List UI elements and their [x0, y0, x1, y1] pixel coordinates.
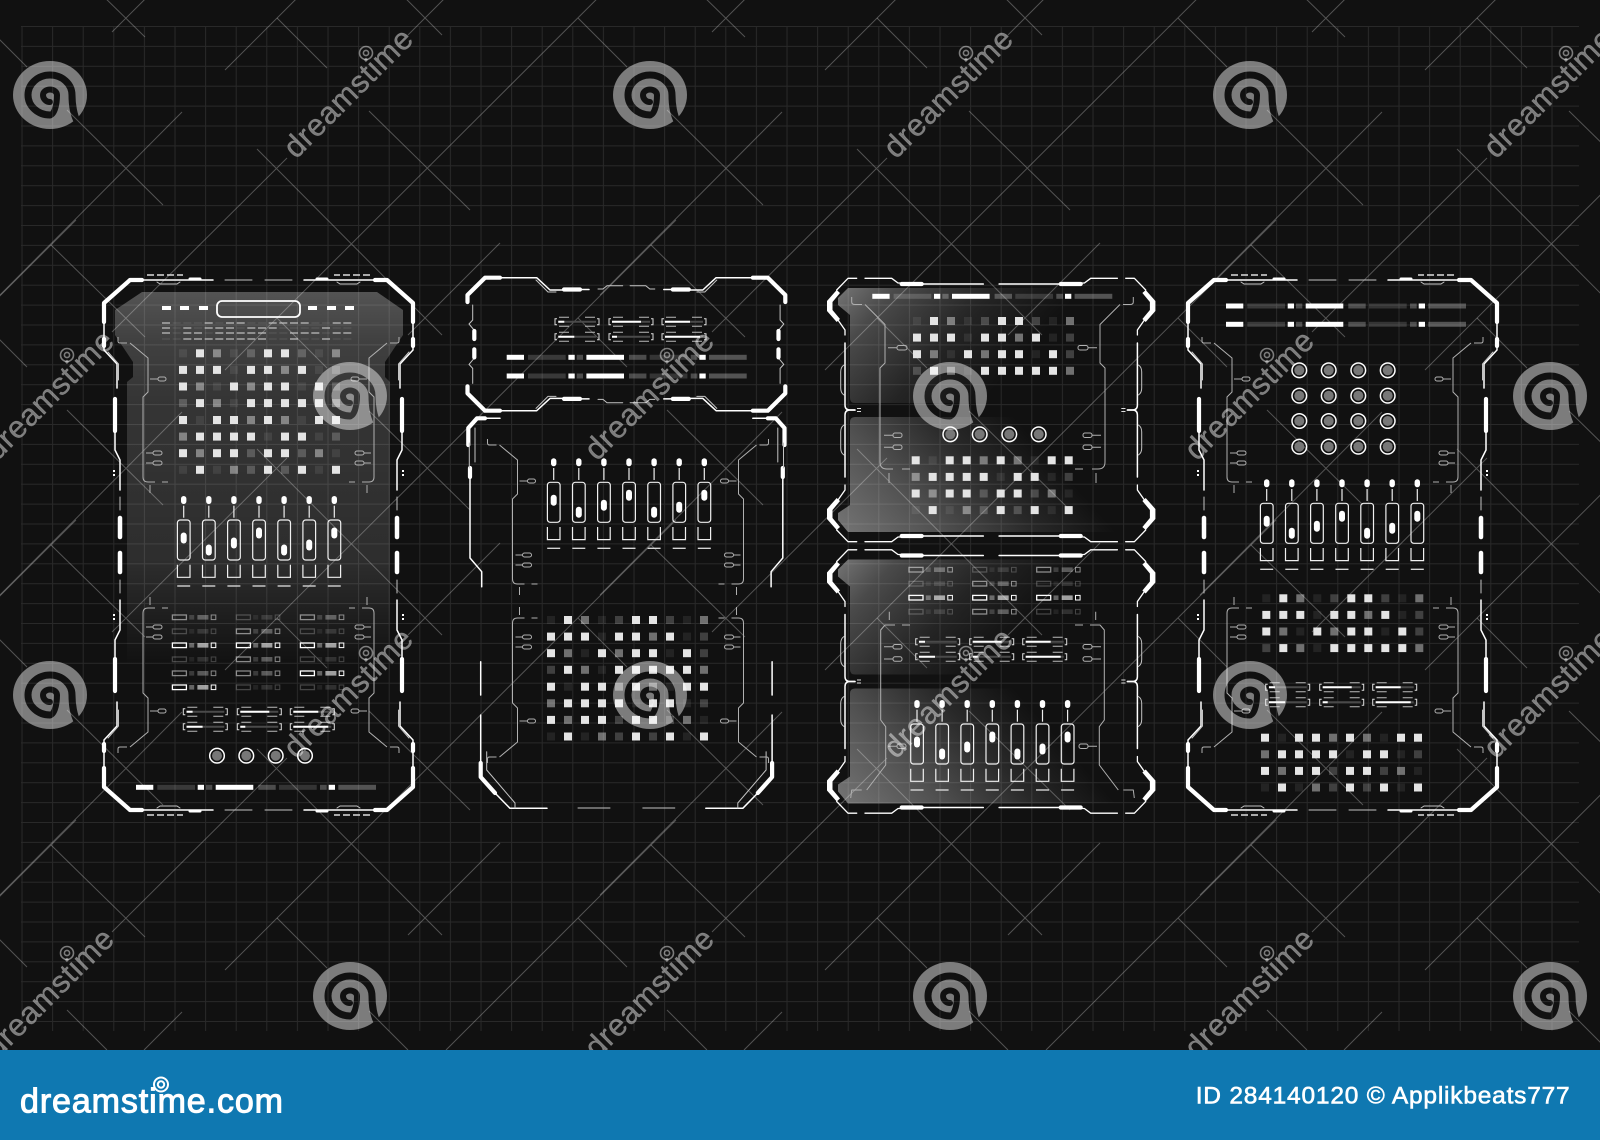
panel 1 tiny dash rows [162, 323, 354, 339]
panel 4 frame [1188, 275, 1497, 815]
panel 4 faders [1260, 479, 1424, 569]
panel 4 sliders [1266, 683, 1417, 707]
panel 3 lower dot matrix [912, 456, 1073, 514]
panel 2 sliders [555, 317, 706, 341]
banner image id and author: ID 284140120 © Applikbeats777 [1196, 1082, 1570, 1109]
panel 1 inner brackets [118, 337, 399, 753]
watermark text row 3 [276, 621, 1600, 765]
panel 3 lower brackets [851, 612, 1134, 798]
watermark text row 3: dreamstime [276, 621, 420, 765]
panel 3 segmented bar [872, 294, 1112, 299]
panel 1 circle indicators [210, 748, 312, 763]
watermark text row 1: dreamstime [276, 21, 420, 165]
banner logo icon [154, 1078, 168, 1092]
panel 1 header dashes and pill [162, 301, 354, 317]
panel fill: phone panel [115, 292, 403, 665]
panel 2 lower frame [468, 418, 785, 808]
panel 3 button table [909, 567, 1080, 614]
watermark text row 2: dreamstime [577, 323, 721, 467]
watermark text row 4: dreamstime [1177, 921, 1321, 1065]
watermark small logo marks [60, 46, 1572, 960]
panel 4 lower dot matrix [1261, 734, 1422, 792]
panel 2 faders [547, 458, 711, 548]
panel 4: HUD screen with circle grid [1188, 275, 1497, 815]
panel 2 segmented bars [507, 355, 747, 378]
panel 4 circle grid [1292, 363, 1395, 454]
bottom banner [0, 1050, 1600, 1140]
watermark text row 2: dreamstime [1177, 323, 1321, 467]
panel 3 faders [910, 700, 1074, 790]
panel 1 sliders [183, 707, 334, 731]
watermark text row 1: dreamstime [876, 21, 1020, 165]
panel fills: stacked panel [838, 288, 1130, 804]
panel 3 lower frame [827, 550, 1155, 813]
panel 3: stacked HUD screen [827, 278, 1155, 813]
watermark text row 1 [276, 21, 1600, 165]
panel 2 top box frame [468, 278, 785, 411]
panel 3 sliders [916, 637, 1067, 661]
watermark text row 3: dreamstime [876, 621, 1020, 765]
panel 1: phone-shaped HUD screen [104, 275, 413, 815]
panel 3 upper dot matrix [913, 317, 1074, 375]
panel 1 segmented bar [136, 785, 376, 790]
panel 2 dot matrix [547, 616, 708, 740]
panel 1 dot matrix [179, 349, 340, 474]
banner logo text: dreamstime.com [20, 1083, 283, 1121]
panel 4 upper dot matrix [1262, 594, 1423, 652]
watermark text row 4: dreamstime [577, 921, 721, 1065]
panel 2: two-part HUD screen [468, 278, 785, 808]
panel 1 button table [172, 615, 344, 690]
panel 4 inner brackets [1202, 337, 1483, 753]
panel 4 segmented bars [1226, 304, 1466, 327]
panel 3 upper brackets [852, 297, 1133, 483]
watermark text row 4 [0, 921, 1321, 1065]
panel 3 upper frame [827, 278, 1155, 542]
watermark text row 2 [0, 323, 1321, 467]
panel 2 inner brackets [488, 439, 768, 763]
panel 3 circle indicators [943, 427, 1046, 442]
panel 1 faders [177, 496, 341, 586]
panel 1 frame [104, 275, 413, 815]
